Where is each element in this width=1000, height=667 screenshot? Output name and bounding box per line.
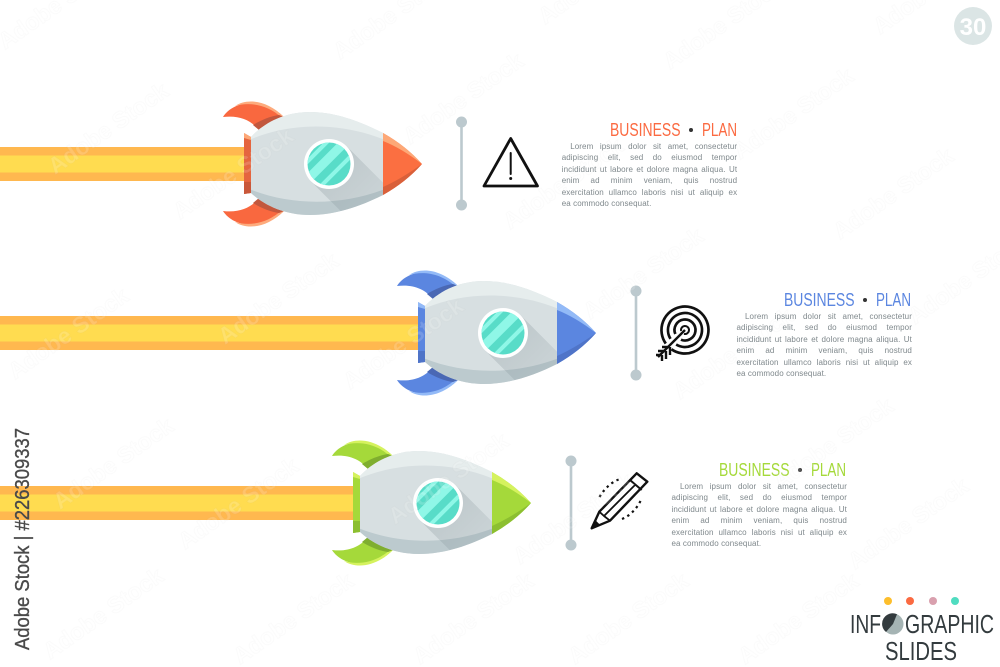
timeline marker 3 (566, 456, 576, 550)
text: Adobe Stock (173, 452, 303, 554)
text: Adobe Stock (228, 567, 358, 667)
text block 3: adipiscing elit, sed do eiusmod tempor (672, 493, 847, 502)
text: Adobe Stock (48, 412, 178, 514)
text: Adobe Stock (828, 142, 958, 244)
heading 1: PLAN (702, 120, 737, 140)
text block 3: exercitation ullamco laboris nisi ut aliquip ex (672, 528, 847, 537)
text: Adobe Stock (338, 292, 468, 394)
badge: slide number 30: 30 (960, 14, 986, 41)
text: Adobe Stock (383, 427, 513, 529)
text: Adobe Stock (843, 472, 973, 574)
text: Adobe Stock (398, 47, 528, 149)
text: Adobe Stock (668, 302, 798, 404)
icon: warning triangle (484, 138, 538, 186)
heading 3: BUSINESS (719, 460, 790, 480)
text: Adobe Stock (408, 567, 538, 667)
text block 2: ea commodo consequat. (736, 369, 826, 378)
heading 1: BUSINESS (610, 120, 680, 140)
rocket 2: blue (397, 270, 596, 396)
heading 2: BUSINESS (784, 290, 854, 310)
text block 1: enim ad minim veniam, quis nostrud (562, 176, 737, 185)
text block 3: enim ad minim veniam, quis nostrud (672, 516, 847, 525)
text block 1 (562, 142, 737, 208)
logo: Infographic Slides: SLIDES (885, 636, 957, 666)
text block 2: enim ad minim veniam, quis nostrud (736, 346, 912, 355)
text block 2: exercitation ullamco laboris nisi ut aliquip ex (736, 358, 912, 367)
flame trail: rocket 1 (0, 147, 245, 181)
text block 1: ea commodo consequat. (562, 199, 651, 208)
text block 1: adipiscing elit, sed do eiusmod tempor (562, 153, 737, 162)
icon: target with arrow (656, 307, 708, 361)
logo: Infographic Slides: INF (850, 609, 881, 639)
text: Adobe Stock (733, 567, 863, 667)
text block 2 (736, 312, 912, 378)
text: Adobe Stock (43, 77, 173, 179)
text block 2: Lorem ipsum dolor sit amet, consectetur (745, 312, 912, 321)
text block 2: adipiscing elit, sed do eiusmod tempor (736, 323, 912, 332)
icon: pencil (592, 473, 647, 528)
text: Adobe Stock (38, 562, 168, 664)
logo: Infographic Slides (850, 597, 994, 666)
text block 1: exercitation ullamco laboris nisi ut aliquip ex (562, 188, 737, 197)
text: Adobe Stock (728, 62, 858, 164)
text block 3: incididunt ut labore et dolore magna aliqua. Ut (672, 505, 847, 514)
text block 1: incididunt ut labore et dolore magna aliqua. Ut (562, 165, 737, 174)
stock credit: Adobe Stock | #226309337 (12, 428, 34, 650)
text: Adobe Stock (213, 247, 343, 349)
text: Adobe Stock (508, 467, 638, 569)
heading 2: PLAN (876, 290, 911, 310)
text block 2: incididunt ut labore et dolore magna aliqua. Ut (736, 335, 912, 344)
badge: slide number 30 (954, 7, 992, 45)
text: Adobe Stock (3, 282, 133, 384)
text: Adobe Stock (168, 122, 298, 224)
text block 3: Lorem ipsum dolor sit amet, consectetur (680, 482, 847, 491)
text: Adobe Stock (768, 392, 898, 494)
timeline marker 1 (456, 116, 467, 210)
text: Adobe Stock (563, 567, 693, 667)
flame trail: rocket 2 (0, 316, 420, 350)
flame trail: rocket 3 (0, 486, 355, 520)
rocket 3: green (332, 440, 531, 566)
text: Adobe Stock (578, 222, 708, 324)
heading 3: PLAN (811, 460, 846, 480)
text block 3 (672, 482, 847, 548)
text: Adobe Stock (498, 132, 628, 234)
timeline marker 2 (630, 286, 642, 380)
text block 3: ea commodo consequat. (672, 539, 761, 548)
rocket 1: orange (223, 102, 422, 226)
text block 1: Lorem ipsum dolor sit amet, consectetur (570, 142, 737, 151)
